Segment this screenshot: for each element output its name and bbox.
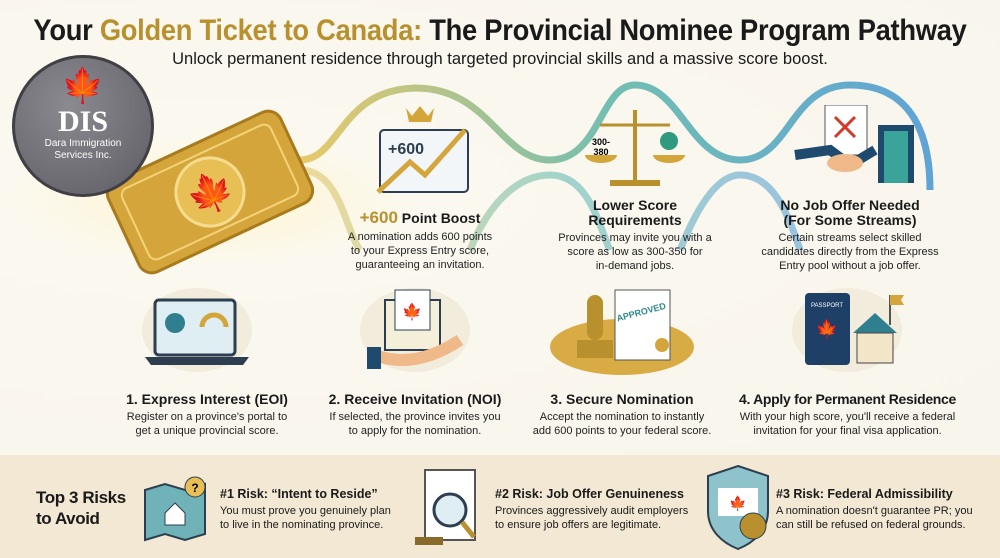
- step 2: receive invitation: If selected, the province invites you: [329, 411, 501, 423]
- risk 3: federal admissibility: A nomination doesn't guarantee PR; you: [776, 505, 973, 517]
- icon: chart: [376, 106, 469, 194]
- icon: document and magnifier: [415, 469, 476, 545]
- step 4: apply for PR: [739, 288, 956, 437]
- step 3: secure nomination: add 600 points to your federal score.: [533, 425, 711, 437]
- feature: lower score requirements: [558, 110, 712, 272]
- feature: +600 point boost: to your Express Entry score,: [351, 245, 489, 257]
- step 4: apply for PR: With your high score, you'll receive a federal: [740, 411, 955, 423]
- feature: +600 point boost: A nomination adds 600 points: [348, 231, 492, 243]
- feature: lower score requirements: score as low as 300-350 for: [567, 246, 703, 258]
- icon: passport and house: PASSPORT: [811, 303, 843, 309]
- risk 1: intent to reside: #1 Risk: “Intent to Reside”: [220, 487, 378, 501]
- icon: map with pin: [144, 476, 206, 542]
- step 3: secure nomination: [533, 290, 711, 437]
- icon: envelope in hand: [360, 288, 470, 372]
- feature: lower score requirements: Provinces may invite you with a: [558, 232, 712, 244]
- step 1: express interest: 1. Express Interest (EOI): [126, 391, 288, 407]
- risk 2: job offer genuineness: Provinces aggressively audit employers: [495, 505, 688, 517]
- feature: +600 point boost: guaranteeing an invitation.: [355, 259, 485, 271]
- feature: no job offer needed: [761, 105, 939, 272]
- logo: DIS: DIS: [58, 105, 108, 138]
- feature: no job offer needed: Certain streams select skilled: [778, 232, 922, 244]
- logo: DIS: [12, 55, 154, 197]
- feature: +600 point boost: +600 Point Boost: [360, 208, 480, 227]
- heading: top 3 risks: [36, 488, 126, 528]
- icon: golden ticket: 🍁: [180, 163, 241, 223]
- icon: map with pin: ?: [191, 481, 199, 495]
- step 1: express interest: get a unique provincial score.: [135, 425, 279, 437]
- risk 1: intent to reside: [144, 476, 391, 542]
- step 4: apply for PR: invitation for your final visa application.: [753, 425, 942, 437]
- feature: no job offer needed: No Job Offer Needed: [780, 197, 920, 213]
- step 3: secure nomination: 3. Secure Nomination: [550, 391, 694, 407]
- risk 2: job offer genuineness: #2 Risk: Job Offer Genuineness: [495, 487, 684, 501]
- icon: shield with stop hand: [707, 465, 769, 550]
- step 1: express interest: Register on a province's portal to: [127, 411, 287, 423]
- title: Your Golden Ticket to Canada: The Provincial Nominee Program Pathway: [33, 14, 967, 47]
- step 2: receive invitation: [329, 288, 501, 437]
- step 4: apply for PR: 4. Apply for Permanent Residence: [739, 391, 956, 407]
- feature: lower score requirements: Requirements: [588, 212, 682, 228]
- icon: envelope in hand: 🍁: [402, 302, 422, 321]
- icon: chart: +600: [388, 141, 424, 158]
- risk 2: job offer genuineness: [415, 469, 688, 545]
- risk 3: federal admissibility: [707, 465, 973, 550]
- icon: scale: 380: [593, 147, 609, 157]
- icon: golden ticket: [106, 110, 314, 274]
- icon: shield with stop hand: 🍁: [729, 495, 747, 512]
- heading: top 3 risks: to Avoid: [36, 509, 100, 528]
- risk 3: federal admissibility: #3 Risk: Federal Admissibility: [776, 487, 953, 501]
- icon: scale: [585, 110, 685, 186]
- risk 1: intent to reside: You must prove you genuinely plan: [220, 505, 391, 517]
- step 2: receive invitation: 2. Receive Invitation (NOI): [329, 391, 501, 407]
- icon: handshake and door: [794, 105, 914, 183]
- text: in-demand jobs.: [596, 260, 674, 272]
- icon: passport and house: 🍁: [816, 318, 838, 339]
- logo: DIS: Services Inc.: [54, 150, 112, 161]
- icon: scale: 300-: [592, 137, 610, 147]
- text: Entry pool without a job offer.: [779, 260, 921, 272]
- panel: top 3 risks: [0, 455, 1000, 558]
- logo: DIS: 🍁: [62, 67, 104, 105]
- risk 1: intent to reside: to live in the nominating province.: [220, 519, 383, 531]
- feature: no job offer needed: (For Some Streams): [783, 212, 917, 228]
- heading: top 3 risks: Top 3 Risks: [36, 488, 126, 507]
- icon: laptop: [142, 288, 252, 372]
- icon: passport and house: [792, 288, 904, 372]
- step 1: express interest: [126, 288, 288, 437]
- subtitle: Unlock permanent residence through targeted provincial skills and a massive score boost.: [172, 50, 828, 68]
- step 3: secure nomination: Accept the nomination to instantly: [540, 411, 704, 423]
- feature: no job offer needed: candidates directly from the Express: [761, 246, 939, 258]
- risk 3: federal admissibility: can still be refused on federal grounds.: [776, 519, 966, 531]
- feature: +600 point boost: [348, 106, 492, 271]
- step 2: receive invitation: to apply for the nomination.: [349, 425, 481, 437]
- feature: lower score requirements: Lower Score: [593, 197, 677, 213]
- logo: DIS: Dara Immigration: [45, 138, 121, 149]
- icon: stamp and approved document: [550, 290, 694, 375]
- risk 2: job offer genuineness: to ensure job offers are legitimate.: [495, 519, 661, 531]
- icon: stamp and approved document: APPROVED: [616, 301, 667, 323]
